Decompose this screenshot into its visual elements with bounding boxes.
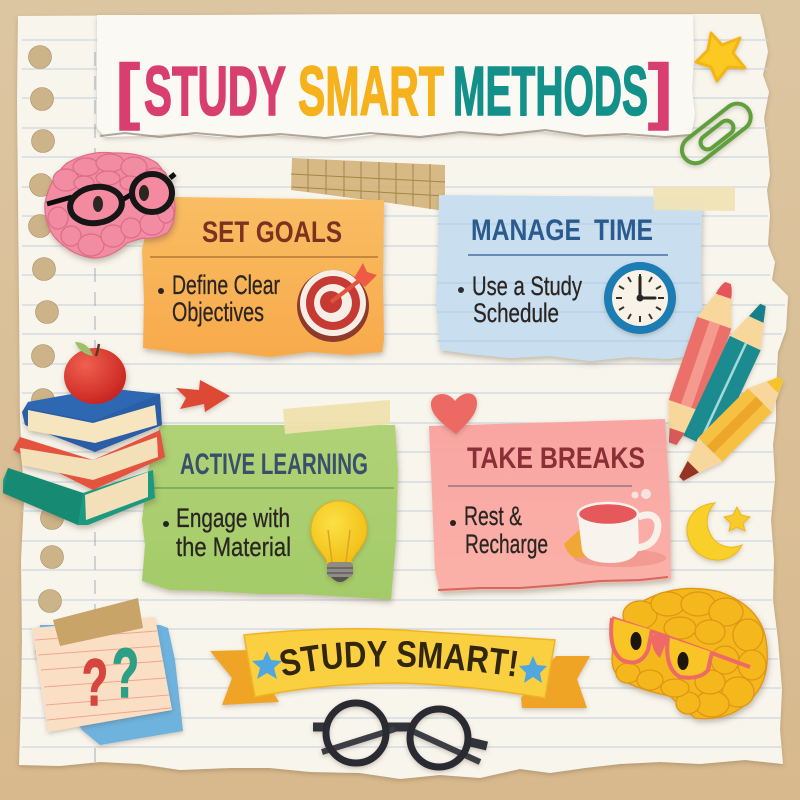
apple [64,342,126,404]
heading: active learning: ACTIVE LEARNING [180,448,368,481]
icon: yellow star [696,33,745,81]
panel: manage time [436,195,702,361]
teal pencil [683,298,778,450]
ribbon banner [210,628,591,712]
question marks [82,634,139,719]
text: define clear objectives: Objectives [172,297,264,327]
question marks: ? [82,645,108,719]
panel: take breaks [429,419,671,592]
icon: light bulb [311,501,367,582]
red pencil [656,277,745,450]
icon: green paperclip [676,98,756,169]
text: engage with the material: Engage with [176,503,290,533]
text: engage with the material: the Material [176,532,291,562]
title text [116,51,672,131]
text: define clear objectives: Define Clear [172,270,280,300]
icon: clock [604,262,676,334]
panel: set goals [142,197,384,357]
red book [13,430,165,490]
tape on sticky note [53,598,143,646]
icon: round black glasses [313,703,487,767]
panel: active learning [142,425,398,600]
icon: yellow brain with glasses [611,588,767,719]
heading: set goals: SET GOALS [202,216,342,249]
heading: manage time: MANAGE [471,214,581,247]
icon: heart [431,393,477,434]
text: use a study schedule: Schedule [473,298,559,328]
icon: tea cup [564,489,666,567]
yellow pencil [669,367,793,491]
text: rest and recharge [450,501,548,559]
title text: [ [116,51,140,131]
sticky notes with question marks [32,598,183,745]
question marks: ? [112,634,139,712]
icon: red arrow [176,380,230,412]
tape on manage time [653,187,735,211]
green book [3,468,155,525]
banner stars [252,651,547,683]
grid washi tape [291,158,445,211]
title strip [97,15,695,139]
text: rest and recharge: Recharge [465,529,548,559]
icon: book stack with apple [3,342,165,525]
icon: moon and star [687,503,750,560]
text: engage with the material [163,503,291,562]
icon: pink brain with glasses [45,152,175,258]
icon: pencils [656,277,793,491]
icon: target [297,263,377,342]
tape on active learning [283,400,390,434]
yellow brain glasses [611,618,750,678]
blue book [22,388,162,452]
title text: ] [648,51,672,131]
text: rest and recharge: Rest & [464,501,522,531]
title text: SMART [298,52,444,130]
title text: STUDY [144,52,286,130]
heading: take breaks: TAKE BREAKS [467,442,645,475]
text: use a study schedule: Use a Study [472,271,582,301]
text: define clear objectives [158,270,280,327]
banner text: STUDY SMART! [280,641,518,676]
heading: manage time: TIME [594,214,653,247]
binder holes [28,46,64,612]
title text: METHODS [453,52,648,130]
pink brain glasses [47,174,175,226]
text: use a study schedule [458,271,582,328]
